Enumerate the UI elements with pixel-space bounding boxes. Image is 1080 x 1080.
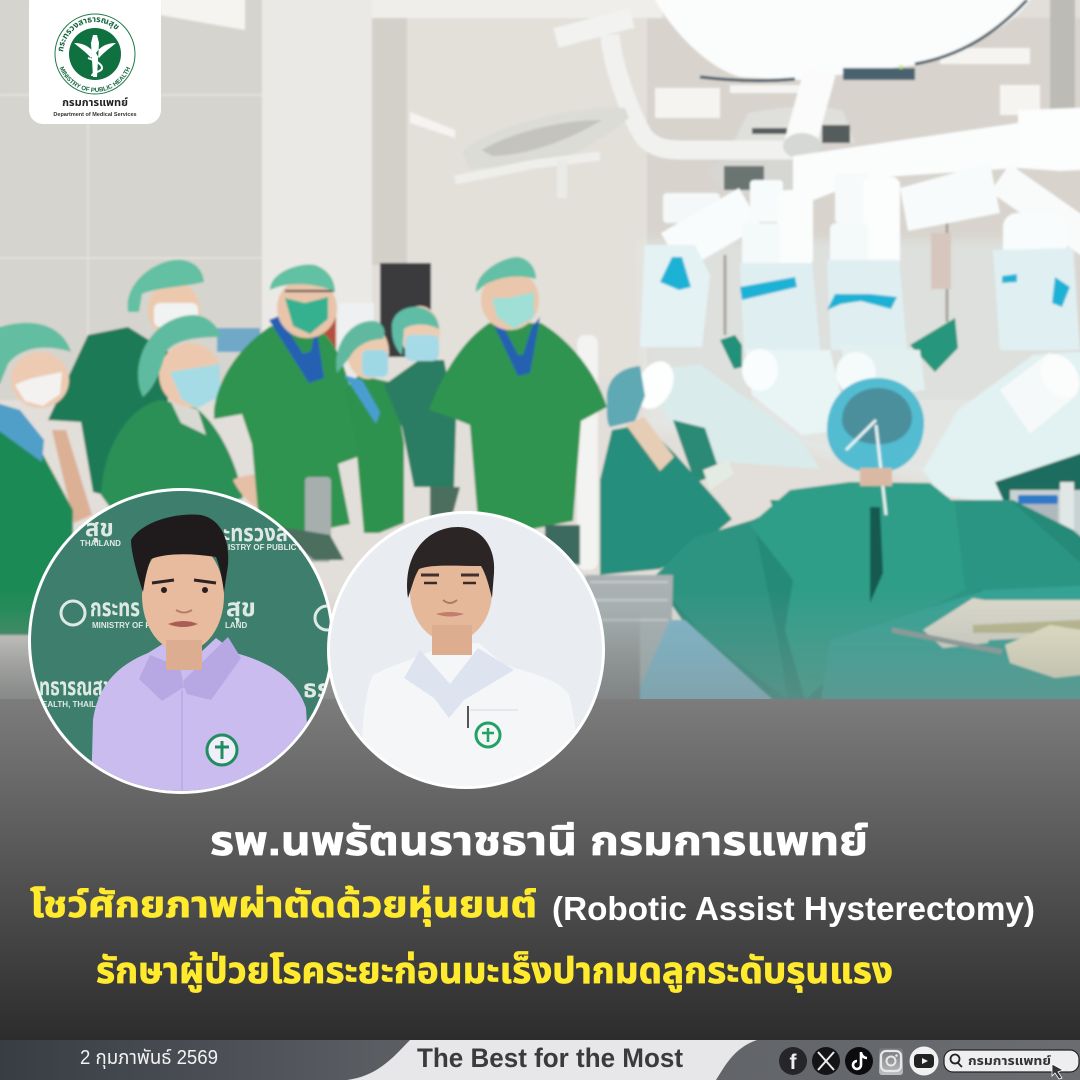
blue ties <box>660 257 1070 310</box>
slogan ribbon: The Best for the Most <box>417 1043 683 1073</box>
footer bar <box>0 1040 1080 1080</box>
icon: TikTok <box>845 1047 873 1075</box>
lower translucent arms <box>662 364 819 469</box>
icon: Instagram <box>879 1048 903 1075</box>
portrait: right executive <box>327 511 605 790</box>
portrait: left executive: ธรณ <box>303 675 353 703</box>
seal <box>54 14 136 94</box>
front lamp <box>618 108 629 121</box>
back lamp <box>733 107 855 143</box>
portrait: left executive: EALTH, THAILA <box>42 700 102 709</box>
room walls and ceiling <box>0 0 1080 720</box>
portrait: left executive: กระทร <box>90 594 140 622</box>
subtitle line <box>30 884 1035 927</box>
slogan ribbon <box>347 1040 757 1080</box>
legs and clutter below team <box>283 485 461 562</box>
logo card: Department of Medical Services <box>29 0 161 124</box>
pen and pocket logo <box>467 706 469 728</box>
far left nurse <box>0 323 73 635</box>
left surgeon <box>673 420 720 483</box>
seal: MINISTRY OF PUBLIC HEALTH <box>60 66 130 92</box>
lead doctor with blue collar <box>429 257 607 565</box>
subtitle line: โชว์ศักยภาพผ่าตัดด้วยหุ่นยนต์ <box>30 884 537 926</box>
lower gradient panel <box>0 699 1080 1040</box>
headline <box>30 818 1035 992</box>
portrait: left executive: LAND <box>225 621 247 630</box>
arm 3 <box>834 180 864 224</box>
title line: รพ.นพรัตนราชธานี กรมการแพทย์ <box>210 818 868 864</box>
instrument trolley and blue sheet <box>584 573 773 699</box>
portrait: left executive: ะทรวงส <box>223 520 288 547</box>
seal: กระทรวงสาธารณสุข <box>58 17 119 52</box>
IV pole and poles <box>725 222 947 335</box>
woman front <box>100 314 259 508</box>
arm 4 <box>1002 212 1068 250</box>
drape haze <box>640 240 1075 480</box>
icon: facebook: f <box>790 1051 798 1074</box>
instruments and gauze <box>923 598 1080 648</box>
icon: YouTube <box>910 1046 938 1076</box>
woman in dark scrubs <box>384 306 456 487</box>
arm 2 <box>750 180 783 222</box>
portrait: left executive <box>28 488 353 800</box>
sterile table <box>822 586 1080 699</box>
portrait: left executive: สุข <box>85 515 114 543</box>
logo text: กรมการแพทย์ <box>62 97 128 109</box>
wall monitor and posters <box>380 263 431 357</box>
icon: X <box>812 1047 840 1075</box>
teal drapes between arms <box>910 318 958 372</box>
portrait: left executive: ทธารณสุข <box>39 673 113 702</box>
portrait: left executive: THAILAND <box>80 539 121 548</box>
woman behind with blue collar <box>336 321 404 533</box>
team in green scrubs <box>0 257 607 635</box>
third line: รักษาผู้ป่วยโรคระยะก่อนมะเร็งปากมดลูกระดับรุนแรง <box>96 950 893 992</box>
fade toward lower panel <box>0 604 1080 699</box>
ceiling surgical lamps and monitor boom <box>455 0 1050 198</box>
da Vinci robot arms <box>629 107 1080 505</box>
photo: robotic surgery operating room <box>0 0 1080 720</box>
face <box>142 554 224 647</box>
logo text <box>53 97 137 118</box>
monitor boom <box>610 35 805 150</box>
thermos <box>305 477 331 562</box>
shirt <box>91 637 311 795</box>
portrait: left executive: MINISTRY OF P <box>92 621 151 630</box>
logo text: Department of Medical Services <box>53 112 137 118</box>
surgical team in teal gowns and drapes <box>600 366 1080 720</box>
arm 1 <box>663 193 720 223</box>
scrub nurse cap <box>827 378 924 473</box>
portrait: left executive: สุข <box>226 594 256 623</box>
subtitle line: (Robotic Assist Hysterectomy) <box>552 890 1035 927</box>
portrait: left executive: ISTRY OF PUBLIC HE <box>228 543 310 552</box>
patient drape base <box>670 498 1080 699</box>
central man with blue collar <box>214 264 360 562</box>
pocket logo <box>207 735 237 765</box>
icon: facebook <box>779 1047 807 1075</box>
search pill: กรมการแพทย์ <box>968 1054 1051 1068</box>
main beam <box>793 123 1018 208</box>
date: 2 กุมภาพันธ์ 2569 <box>80 1047 218 1069</box>
equipment behind right <box>994 452 1080 502</box>
face <box>410 542 492 642</box>
search pill <box>944 1050 1079 1079</box>
man at back <box>48 260 204 523</box>
